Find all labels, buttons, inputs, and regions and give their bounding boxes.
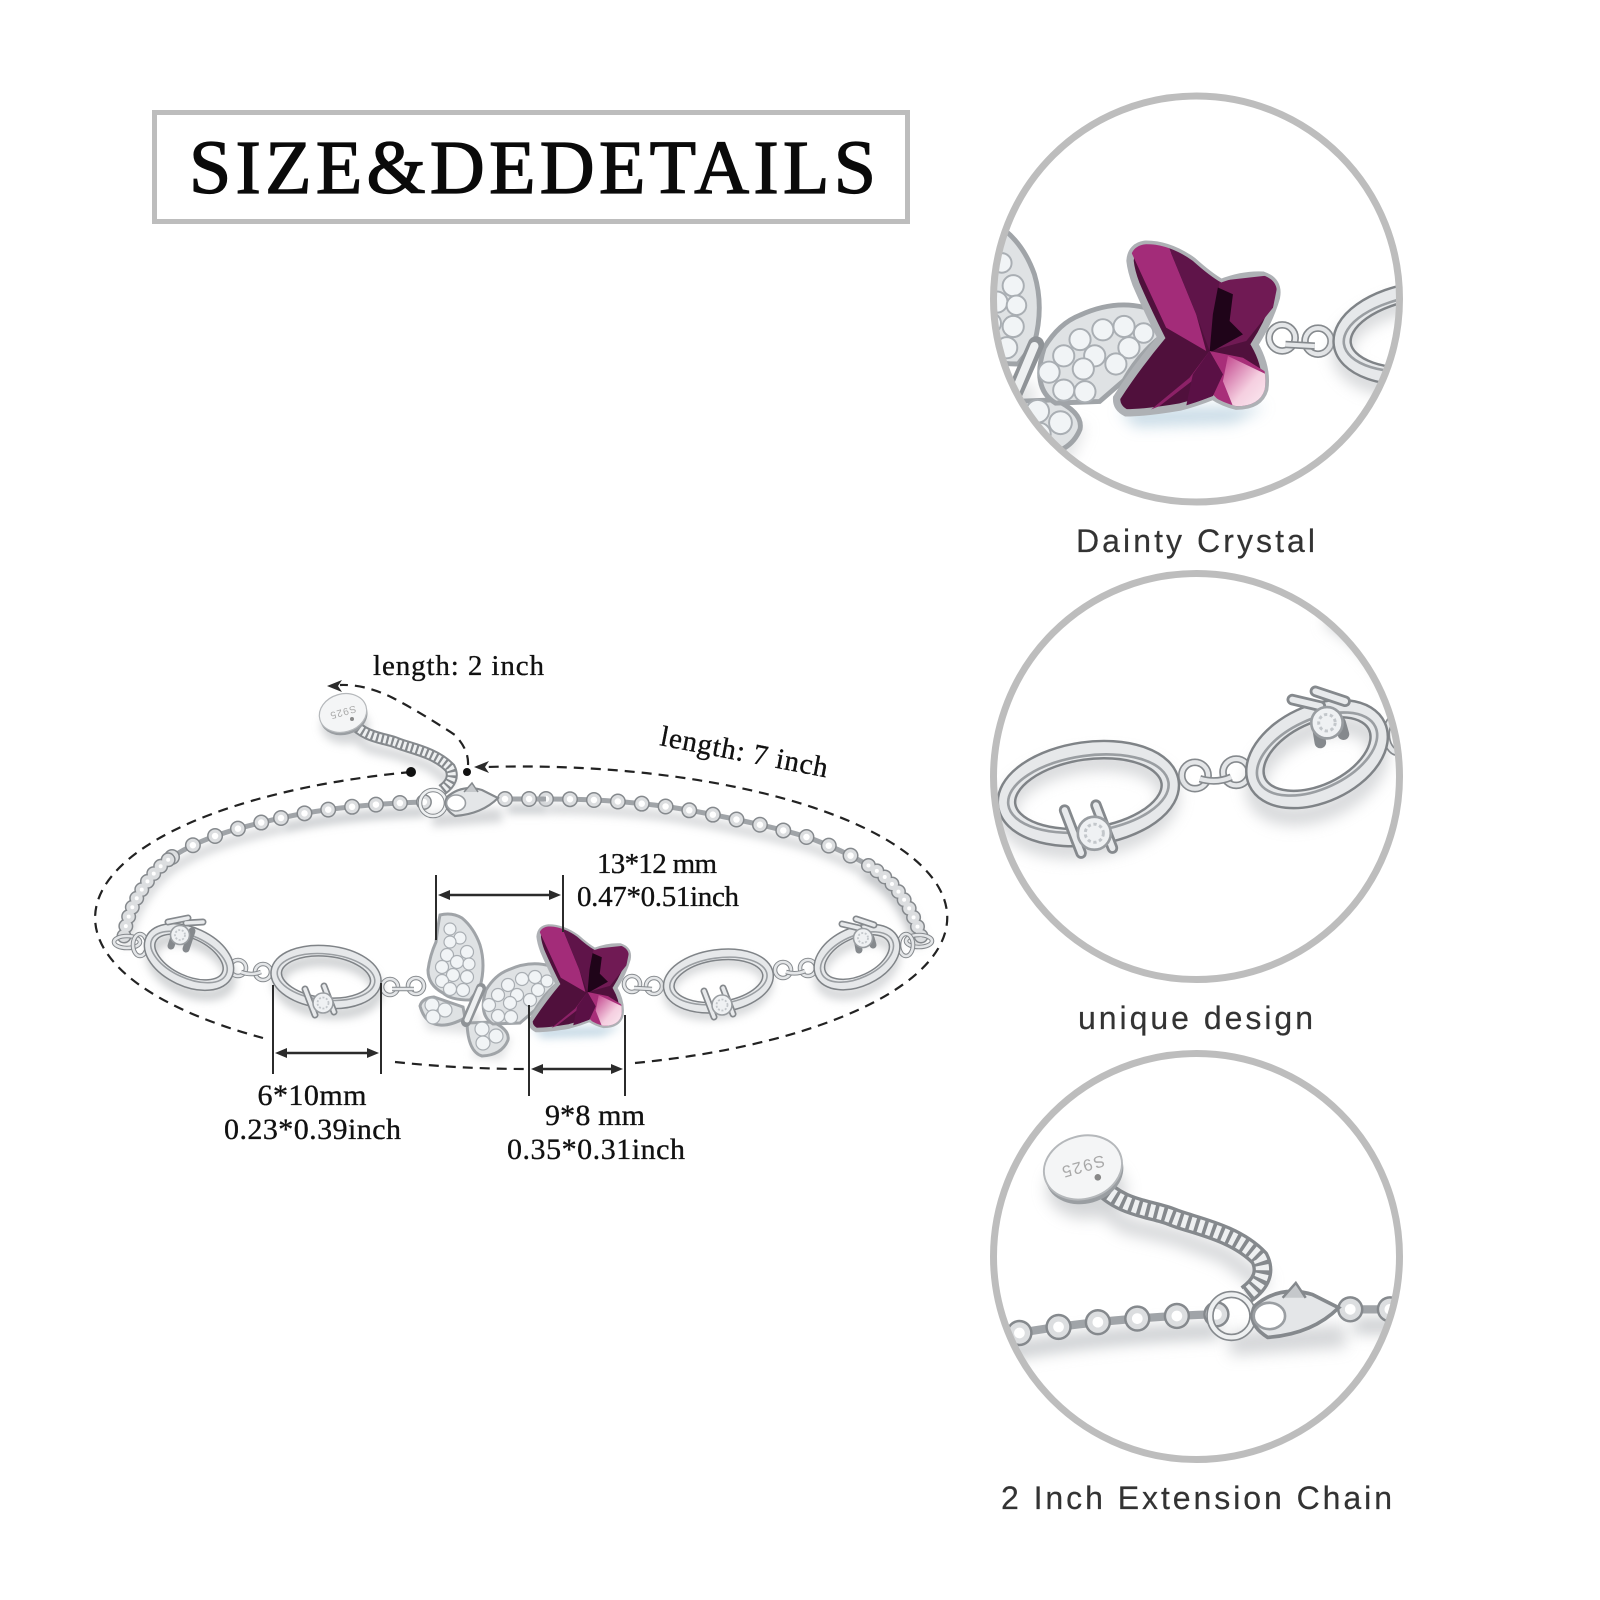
detail circle: unique design	[994, 574, 1441, 980]
detail circle: 2 inch extension chain	[981, 1054, 1421, 1460]
butterfly	[420, 914, 662, 1060]
annotation: 7 inch bracelet length dashed ellipse	[95, 761, 947, 1069]
right oval link	[665, 948, 772, 1021]
label: 0.35*0.31inch: 0.35*0.31inch	[507, 1133, 685, 1166]
dimension: oval link width	[273, 983, 381, 1074]
label: 0.23*0.39inch: 0.23*0.39inch	[224, 1113, 401, 1146]
title box	[154, 112, 908, 222]
label: length 7 inch: length: 7 inch	[658, 720, 831, 784]
left part of chain with oval links	[114, 799, 868, 1018]
dimension: crystal width	[529, 1005, 625, 1096]
caption: 2 Inch Extension Chain: 2 Inch Extension Chain	[1001, 1480, 1392, 1516]
detail circle: dainty crystal	[990, 92, 1403, 506]
far right oval link	[775, 864, 932, 1006]
annotation: 2 inch extension dashed arrow	[327, 680, 471, 776]
main bracelet illustration	[114, 688, 932, 1060]
label: 0.47*0.51inch: 0.47*0.51inch	[577, 881, 740, 913]
label: 6*10mm: 6*10mm	[258, 1079, 366, 1112]
label: 13*12 mm: 13*12 mm	[597, 848, 717, 880]
caption: unique design: unique design	[1078, 1000, 1313, 1036]
extension chain, tag and clasp	[315, 688, 502, 820]
chain beside the clasp	[281, 799, 548, 828]
label: length 2 inch: length: 2 inch	[373, 650, 544, 682]
label: 9*8 mm: 9*8 mm	[545, 1099, 645, 1132]
title text: SIZE&DEDETAILS	[189, 126, 876, 210]
dimension: butterfly width	[436, 875, 563, 940]
caption: Dainty Crystal: Dainty Crystal	[1076, 523, 1315, 559]
